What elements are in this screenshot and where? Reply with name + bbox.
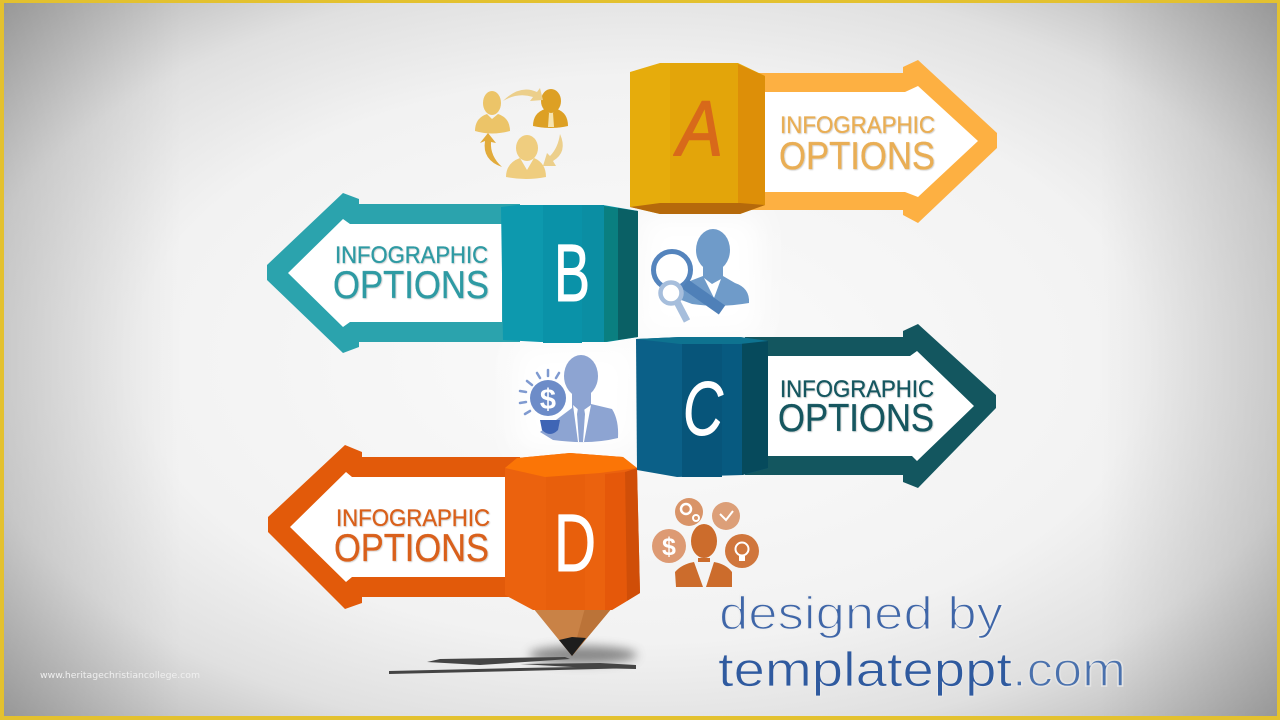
heading D xyxy=(334,505,490,570)
gears badge xyxy=(675,498,703,526)
icon: team cycle xyxy=(475,88,568,179)
arrow C inner panel xyxy=(768,351,974,461)
icon: person with magnifier xyxy=(654,229,749,321)
option A: orange arrow with block xyxy=(630,60,997,223)
letter C: C xyxy=(683,367,724,452)
icon: person with idea bulb xyxy=(520,355,618,442)
credit: templateppt.com: templateppt xyxy=(718,644,1012,697)
letter D: D xyxy=(554,498,596,589)
heading A: OPTIONS xyxy=(779,135,935,178)
heading B: OPTIONS xyxy=(333,264,489,307)
dollar sign: $ xyxy=(540,384,556,416)
letter B: B xyxy=(554,228,590,319)
option B: teal arrow with block xyxy=(267,193,638,353)
letter A: A xyxy=(673,84,723,172)
person silhouette xyxy=(540,355,618,442)
shirt and tie xyxy=(573,405,591,442)
heading C xyxy=(778,376,934,440)
arrow C outline xyxy=(745,324,996,488)
block C xyxy=(636,337,768,477)
pencil shadow xyxy=(529,646,637,664)
arrow A inner panel xyxy=(765,86,978,197)
person with tie xyxy=(533,89,568,128)
heading B xyxy=(333,242,489,307)
arrow D inner panel xyxy=(290,472,505,582)
bulb xyxy=(530,380,566,416)
option D: orange arrow with pencil xyxy=(268,445,640,674)
person silhouette xyxy=(668,229,749,306)
heading D: OPTIONS xyxy=(334,527,489,570)
pencil body xyxy=(505,453,640,610)
person with collar xyxy=(506,135,546,179)
arrow B outline xyxy=(267,193,520,353)
bulb badge xyxy=(725,534,759,568)
pencil tip xyxy=(533,608,612,656)
option C: dark teal arrow with block xyxy=(636,324,996,488)
watermark url: www.heritagechristiancollege.com xyxy=(40,671,200,681)
heading B: INFOGRAPHIC xyxy=(335,242,488,269)
large magnifier xyxy=(654,252,722,310)
cycle arrows xyxy=(480,88,563,167)
heading C: INFOGRAPHIC xyxy=(780,376,934,403)
heading A: INFOGRAPHIC xyxy=(780,112,935,139)
heading D: INFOGRAPHIC xyxy=(336,505,490,532)
small magnifier xyxy=(660,282,687,321)
credit: designed by: designed by xyxy=(719,587,1003,639)
credit: templateppt.com: .com xyxy=(1012,644,1126,697)
bulb rays xyxy=(520,370,559,414)
block A xyxy=(630,63,765,214)
person with bow tie xyxy=(475,91,510,134)
pencil scribble lines xyxy=(389,657,636,674)
credit: templateppt.com xyxy=(718,644,1126,697)
clock badge xyxy=(712,502,740,530)
heading A xyxy=(779,112,935,178)
dollar badge: $ xyxy=(662,533,676,561)
arrow D outline xyxy=(268,445,520,609)
arrow A outline xyxy=(750,60,997,223)
heading C: OPTIONS xyxy=(778,397,934,440)
arrow B inner panel xyxy=(288,219,502,327)
central person xyxy=(675,524,732,587)
block B xyxy=(501,205,638,343)
icon: person with gears, clock, money, idea xyxy=(652,498,759,587)
